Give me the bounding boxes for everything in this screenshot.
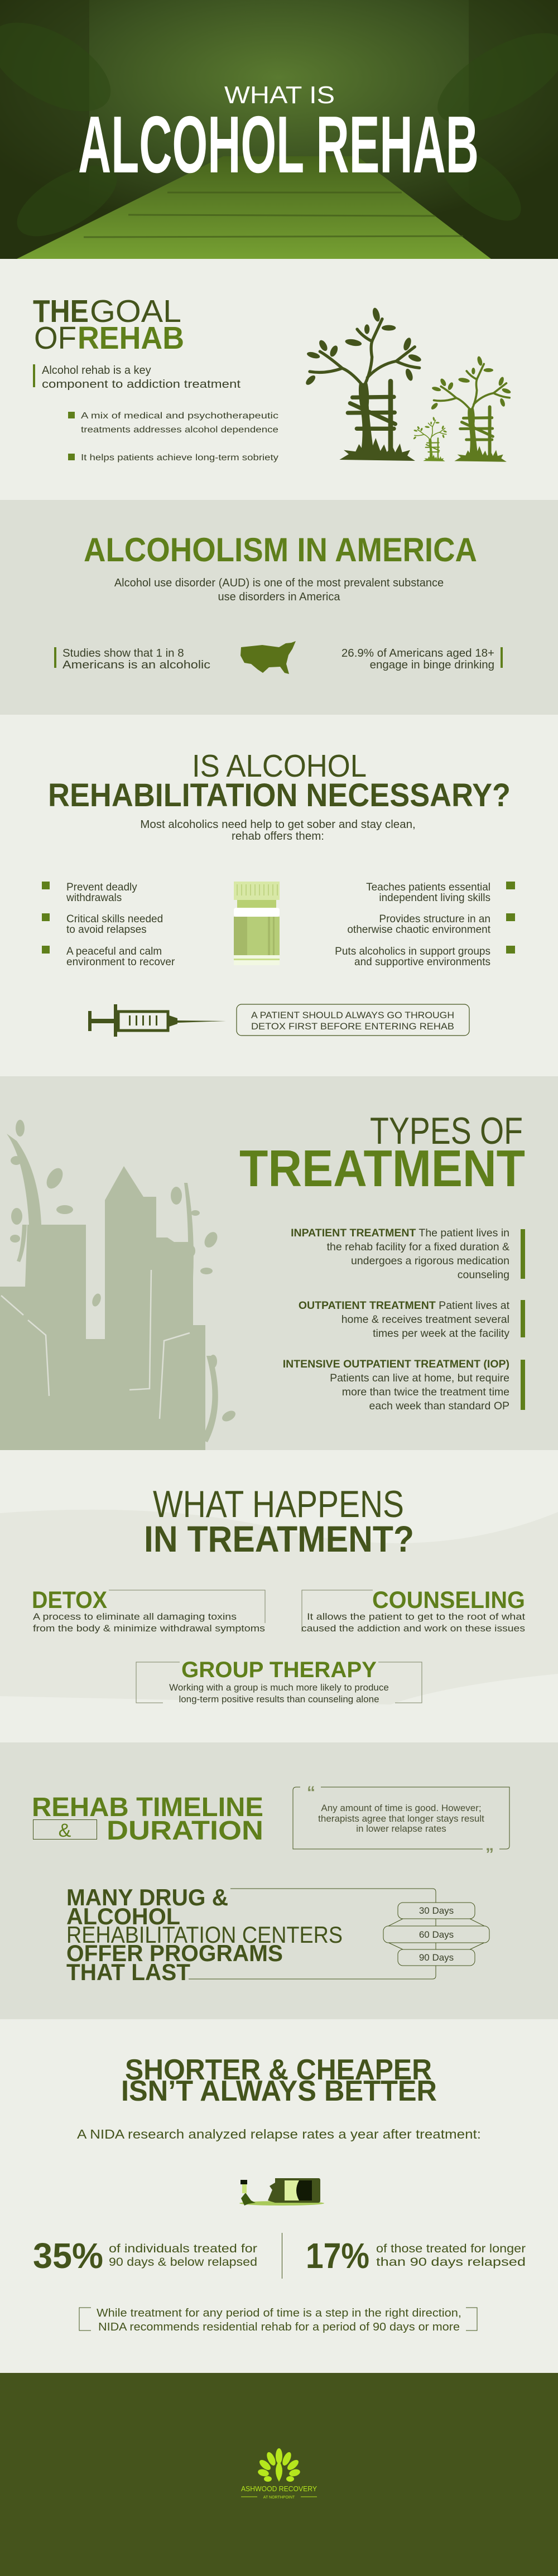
item: outpatient treatment: OUTPATIENT TREATMENT Patient lives at <box>299 1299 510 1312</box>
left benefits list: A peaceful and calm <box>66 946 162 957</box>
subtitle: rehab offers them: <box>232 830 324 842</box>
item: inpatient treatment: INPATIENT TREATMENT The patient lives in <box>291 1227 509 1239</box>
item: inpatient treatment: counseling <box>458 1269 509 1281</box>
stat: 17%: than 90 days relapsed <box>376 2256 526 2269</box>
card: counseling: caused the addiction and work on these issues <box>301 1623 525 1634</box>
illustration: bandaged trees <box>304 307 512 462</box>
illustration: overgrown city <box>0 1120 237 1450</box>
left benefits list: Prevent deadly <box>66 882 137 893</box>
right benefits list <box>335 882 515 968</box>
item: outpatient treatment: times per week at the facility <box>373 1327 509 1340</box>
text: many centers offer programs: ALCOHOL <box>66 1903 180 1929</box>
heading: the goal of rehab: THE <box>33 293 89 329</box>
stat: 1 in 8 <box>54 647 210 671</box>
logo: Ashwood Recovery <box>241 2448 317 2500</box>
stat: 17%: 17% <box>306 2236 369 2276</box>
stat: 35%: 35% <box>33 2236 103 2276</box>
note: NIDA recommendation <box>79 2307 477 2333</box>
left benefits list: Critical skills needed <box>66 913 163 925</box>
icon: USA map <box>240 641 296 674</box>
icon: syringe <box>88 1004 226 1037</box>
heading: alcoholism in america: ALCOHOLISM IN AMERICA <box>84 531 477 569</box>
goal bullets: treatments addresses alcohol dependence <box>81 425 278 435</box>
quote box: “ <box>307 1783 315 1802</box>
stat: 17% <box>306 2236 526 2276</box>
card: counseling: It allows the patient to get to the root of what <box>307 1611 525 1622</box>
card: counseling: COUNSELING <box>372 1587 525 1614</box>
note: NIDA recommendation: While treatment for any period of time is a step in the right direction, <box>97 2307 461 2319</box>
intro text: Alcohol rehab is a key <box>42 364 151 377</box>
heading: is alcohol rehabilitation necessary: REHABILITATION NECESSARY? <box>48 777 511 813</box>
heading: rehab timeline & duration <box>32 1793 263 1846</box>
heading: the goal of rehab: GOAL <box>90 293 181 329</box>
heading: what happens in treatment: IN TREATMENT? <box>144 1518 414 1559</box>
heading: what happens in treatment <box>144 1483 414 1559</box>
section bg: what happens <box>0 1450 558 1742</box>
stat: 26.9%: engage in binge drinking <box>370 658 494 671</box>
callout: detox first <box>237 1004 469 1036</box>
heading: the goal of rehab: REHAB <box>78 320 184 356</box>
heading: rehab timeline & duration: DURATION <box>107 1816 263 1846</box>
item: intensive outpatient <box>283 1358 525 1412</box>
item: inpatient treatment: the rehab facility for a fixed duration & <box>327 1241 509 1253</box>
card: detox: DETOX <box>32 1587 107 1614</box>
left benefits list: environment to recover <box>66 956 175 968</box>
item: intensive outpatient: more than twice the treatment time <box>342 1386 509 1398</box>
item: inpatient treatment: undergoes a rigorous medication <box>351 1255 509 1267</box>
section bg: goal <box>0 259 558 500</box>
heading: is alcohol rehabilitation necessary <box>48 748 511 813</box>
section bg: is rehab necessary <box>0 715 558 1076</box>
heading: is alcohol rehabilitation necessary: IS ALCOHOL <box>192 748 367 784</box>
quote box: ” <box>485 1845 494 1864</box>
subtitle <box>140 818 416 842</box>
card: detox: A process to eliminate all damaging toxins <box>33 1611 237 1622</box>
section bg: alcoholism in america <box>0 500 558 715</box>
left benefits list: withdrawals <box>66 892 122 904</box>
logo: Ashwood Recovery: AT NORTHPOINT <box>263 2496 295 2500</box>
intro text: component to addiction treatment <box>42 378 241 391</box>
right benefits list: otherwise chaotic environment <box>347 924 491 936</box>
item: intensive outpatient: each week than standard OP <box>369 1400 509 1412</box>
left benefits list: to avoid relapses <box>66 924 147 936</box>
subtitle: Alcohol use disorder (AUD) is one of the most prevalent substance <box>114 577 444 589</box>
logo: Ashwood Recovery: ASHWOOD RECOVERY <box>241 2484 317 2493</box>
subtitle: use disorders in America <box>218 591 340 603</box>
section bg: timeline <box>0 1742 558 2019</box>
right benefits list: and supportive environments <box>354 956 490 968</box>
stat: 26.9%: 26.9% of Americans aged 18+ <box>341 647 494 659</box>
heading: types of treatment: TYPES OF <box>370 1110 523 1152</box>
card: group therapy: GROUP THERAPY <box>181 1658 377 1682</box>
text: many centers offer programs: THAT LAST <box>66 1959 190 1985</box>
note: NIDA recommendation: NIDA recommends residential rehab for a period of 90 days or more <box>98 2321 460 2333</box>
heading: rehab timeline & duration: & <box>59 1820 71 1841</box>
heading: shorter & cheaper: SHORTER & CHEAPER <box>125 2054 432 2086</box>
subtitle <box>114 577 444 603</box>
heading: the goal of rehab: OF <box>34 320 76 356</box>
card: group therapy: long-term positive results than counseling alone <box>179 1694 379 1705</box>
quote box: therapists agree that longer stays result <box>318 1813 484 1824</box>
item: inpatient treatment <box>291 1227 525 1281</box>
footer <box>0 2373 558 2576</box>
heading: rehab timeline & duration: REHAB TIMELINE <box>32 1793 263 1822</box>
card: detox: from the body & minimize withdrawal symptoms <box>33 1623 265 1634</box>
stat: 35% <box>33 2236 257 2276</box>
section bg: shorter & cheaper <box>0 2019 558 2373</box>
text: many centers offer programs: OFFER PROGRAMS <box>66 1940 283 1966</box>
hero title: WHAT IS <box>224 81 335 109</box>
program length pills: 60 Days <box>419 1929 454 1940</box>
icon: pill bottle <box>234 882 280 965</box>
program length pills <box>383 1903 489 1966</box>
text: many centers offer programs <box>66 1884 436 1985</box>
program length pills: 30 Days <box>419 1905 454 1916</box>
subtitle: A NIDA research analyzed relapse rates a year after treatment: <box>77 2127 481 2141</box>
right benefits list: independent living skills <box>379 892 490 904</box>
intro text <box>33 364 241 391</box>
quote box: Any amount of time is good. However; <box>321 1803 482 1813</box>
right benefits list: Puts alcoholics in support groups <box>335 946 490 957</box>
section bg: types of treatment <box>0 1076 558 1450</box>
callout: detox first: A PATIENT SHOULD ALWAYS GO THROUGH <box>251 1010 454 1020</box>
quote box: in lower relapse rates <box>356 1823 446 1834</box>
text: many centers offer programs: MANY DRUG & <box>66 1884 228 1910</box>
right benefits list: Teaches patients essential <box>366 882 490 893</box>
subtitle: Most alcoholics need help to get sober and stay clean, <box>140 818 416 831</box>
stat: 1 in 8: Studies show that 1 in 8 <box>62 647 184 659</box>
icon: broken bottle <box>239 2178 324 2206</box>
heading: shorter & cheaper <box>121 2054 437 2107</box>
stat: 35%: 90 days & below relapsed <box>109 2256 257 2269</box>
heading: types of treatment: TREATMENT <box>239 1139 525 1197</box>
item: intensive outpatient: Patients can live at home, but require <box>330 1372 509 1384</box>
heading: types of treatment <box>239 1110 525 1197</box>
card: detox <box>32 1587 265 1634</box>
right benefits list: Provides structure in an <box>379 913 490 925</box>
heading: the goal of rehab <box>33 293 184 356</box>
goal bullets <box>68 411 278 463</box>
stat: 35%: of individuals treated for <box>109 2242 257 2255</box>
card: group therapy <box>136 1658 422 1705</box>
callout: detox first: DETOX FIRST BEFORE ENTERING REHAB <box>251 1021 454 1032</box>
goal bullets: It helps patients achieve long-term sobriety <box>81 453 278 463</box>
item: outpatient treatment: home & receives treatment several <box>341 1313 509 1326</box>
card: group therapy: Working with a group is much more likely to produce <box>169 1682 389 1693</box>
card: counseling <box>301 1587 525 1634</box>
stat: 17%: of those treated for longer <box>376 2242 526 2255</box>
item: intensive outpatient: INTENSIVE OUTPATIENT TREATMENT (IOP) <box>283 1358 509 1370</box>
program length pills: 90 Days <box>419 1952 454 1963</box>
heading: shorter & cheaper: ISN’T ALWAYS BETTER <box>121 2075 437 2107</box>
item: outpatient treatment <box>299 1299 525 1340</box>
hero background <box>0 0 558 259</box>
quote box <box>293 1783 509 1864</box>
heading: what happens in treatment: WHAT HAPPENS <box>153 1483 404 1525</box>
goal bullets: A mix of medical and psychotherapeutic <box>81 411 278 421</box>
left benefits list <box>42 882 175 968</box>
stat: 26.9% <box>341 647 503 671</box>
stat: 1 in 8: Americans is an alcoholic <box>62 658 210 671</box>
text: many centers offer programs: REHABILITATION CENTERS <box>66 1922 343 1948</box>
